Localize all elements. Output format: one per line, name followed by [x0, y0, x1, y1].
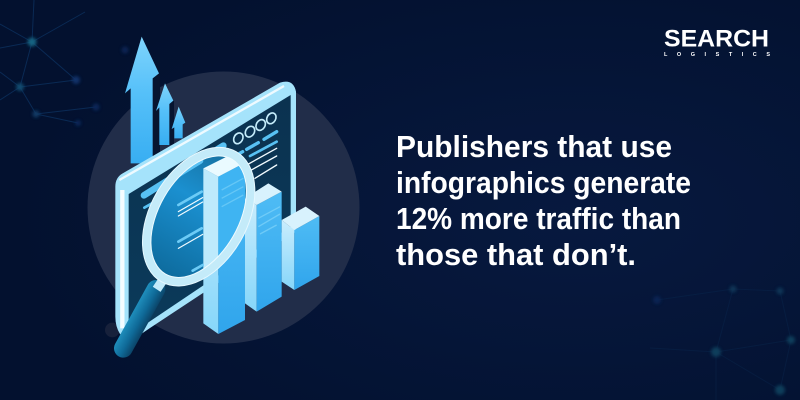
bar chart [203, 155, 319, 334]
lens glass [125, 133, 272, 300]
network pattern: top left [0, 0, 128, 126]
icon: growth arrows [125, 37, 185, 163]
bar seen through lens [177, 157, 246, 272]
headline: Publishers that use [396, 129, 672, 164]
screen window dots [232, 111, 278, 145]
monitor base shadow [105, 323, 120, 337]
short bar [282, 207, 319, 290]
logo wordmark: SEARCH [664, 26, 769, 52]
magnifier handle [123, 278, 164, 348]
tall bar [203, 155, 245, 334]
headline: 12% more traffic than [396, 201, 681, 236]
lens text lines [177, 160, 204, 272]
logo [664, 26, 770, 58]
lens ring [125, 133, 272, 300]
logo tagline: LOGISTICS [664, 52, 770, 58]
headline: those that don’t. [396, 237, 636, 272]
screen text lines [144, 132, 277, 208]
icon: magnifying glass [114, 146, 256, 358]
headline: infographics generate [396, 165, 691, 200]
network pattern: bottom right [650, 286, 795, 400]
lens [142, 146, 256, 286]
backdrop circle [88, 72, 360, 344]
illustration: analytics monitor with magnifier [105, 37, 319, 348]
monitor screen [129, 95, 291, 336]
headline [396, 129, 691, 272]
medium bar [245, 183, 282, 312]
monitor frame [115, 82, 296, 342]
